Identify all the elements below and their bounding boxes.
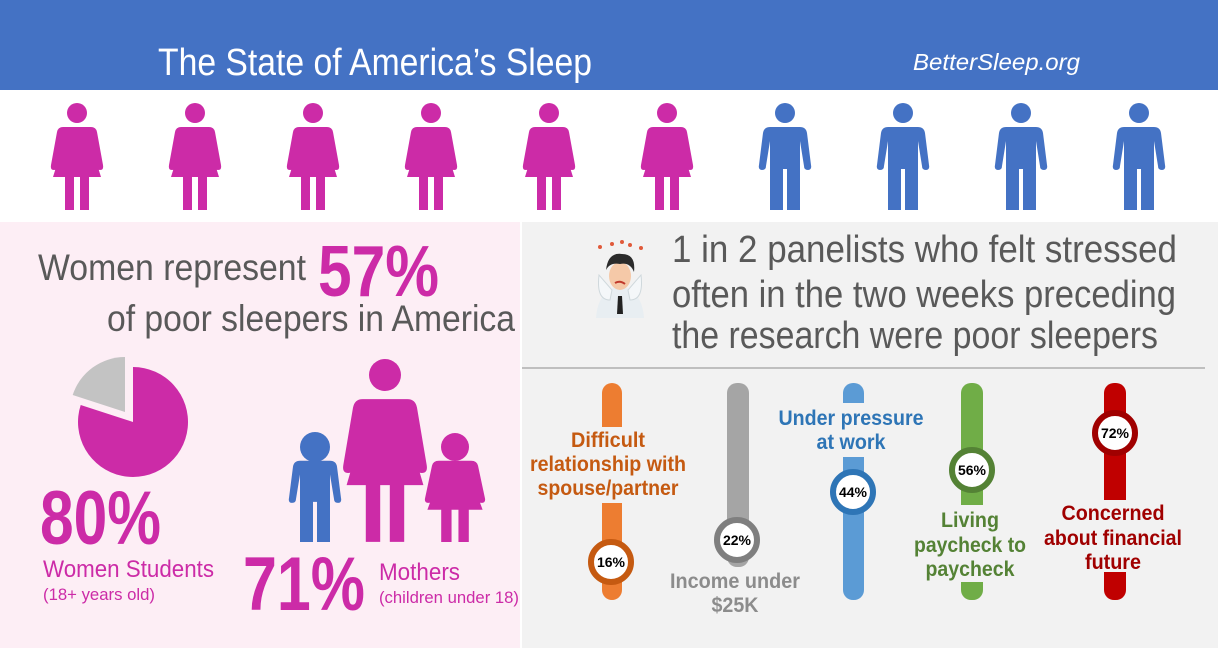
- bar: concerned about financial future 72%: about financial: [1044, 527, 1182, 550]
- stat: 80% women students: [40, 476, 214, 604]
- bar: income under $25K 22%: 22%: [723, 532, 752, 548]
- bar: concerned about financial future 72%: [1040, 383, 1190, 600]
- stat: 71% mothers: [243, 542, 519, 627]
- headline women 57%: of poor sleepers in America: [107, 298, 515, 339]
- icon: mother and children: [289, 359, 485, 542]
- stat: 80% women students: (18+ years old): [43, 585, 155, 604]
- panel: women: [0, 222, 520, 648]
- panel: stress: [522, 222, 1218, 648]
- bar: concerned about financial future 72%: future: [1085, 551, 1141, 574]
- headline women 57%: 57%: [318, 232, 439, 312]
- stat: 71% mothers: 71%: [243, 542, 365, 627]
- headline women 57%: Women represent: [38, 247, 307, 288]
- headline stress text: [672, 229, 1177, 357]
- bar: under pressure at work 44%: Under pressure: [778, 407, 924, 430]
- bar: concerned about financial future 72%: Concerned: [1062, 502, 1164, 525]
- bar: concerned about financial future 72%: 72%: [1101, 425, 1130, 441]
- bar: income under $25K 22%: [670, 383, 800, 617]
- bar: difficult relationship 16%: [525, 383, 695, 600]
- bar: living paycheck to paycheck 56%: 56%: [958, 462, 987, 478]
- bar: living paycheck to paycheck 56%: paycheck: [926, 558, 1015, 581]
- bar: income under $25K 22%: $25K: [712, 594, 758, 617]
- site name: BetterSleep.org: [913, 49, 1080, 75]
- bar: difficult relationship 16%: spouse/partner: [538, 477, 678, 500]
- bar: income under $25K 22%: Income under: [670, 570, 800, 593]
- headline stress text: the research were poor sleepers: [672, 315, 1158, 357]
- icon: stressed man: [596, 240, 644, 318]
- people row: 6 women 4 men: [51, 103, 1165, 210]
- bar: living paycheck to paycheck 56%: Living: [941, 509, 999, 532]
- title: The State of America’s Sleep: [158, 42, 592, 84]
- headline women 57%: [38, 232, 515, 339]
- stat: 80% women students: Women Students: [43, 556, 214, 583]
- headline stress text: 1 in 2 panelists who felt stressed: [672, 229, 1177, 271]
- bar: difficult relationship 16%: relationship with: [530, 453, 686, 476]
- header bar: [0, 0, 1218, 90]
- stat: 71% mothers: (children under 18): [379, 588, 519, 607]
- bar: under pressure at work 44%: [770, 383, 935, 600]
- stat: 71% mothers: Mothers: [379, 559, 460, 586]
- pie chart 80%: [73, 357, 188, 477]
- bar: under pressure at work 44%: 44%: [839, 484, 868, 500]
- bar: under pressure at work 44%: at work: [816, 431, 886, 454]
- headline stress text: often in the two weeks preceding: [672, 274, 1176, 316]
- bar: difficult relationship 16%: Difficult: [571, 429, 645, 452]
- bar: living paycheck to paycheck 56%: paycheck to: [914, 534, 1026, 557]
- bar: living paycheck to paycheck 56%: [905, 383, 1035, 600]
- stat: 80% women students: 80%: [40, 476, 161, 561]
- bar: difficult relationship 16%: 16%: [597, 554, 626, 570]
